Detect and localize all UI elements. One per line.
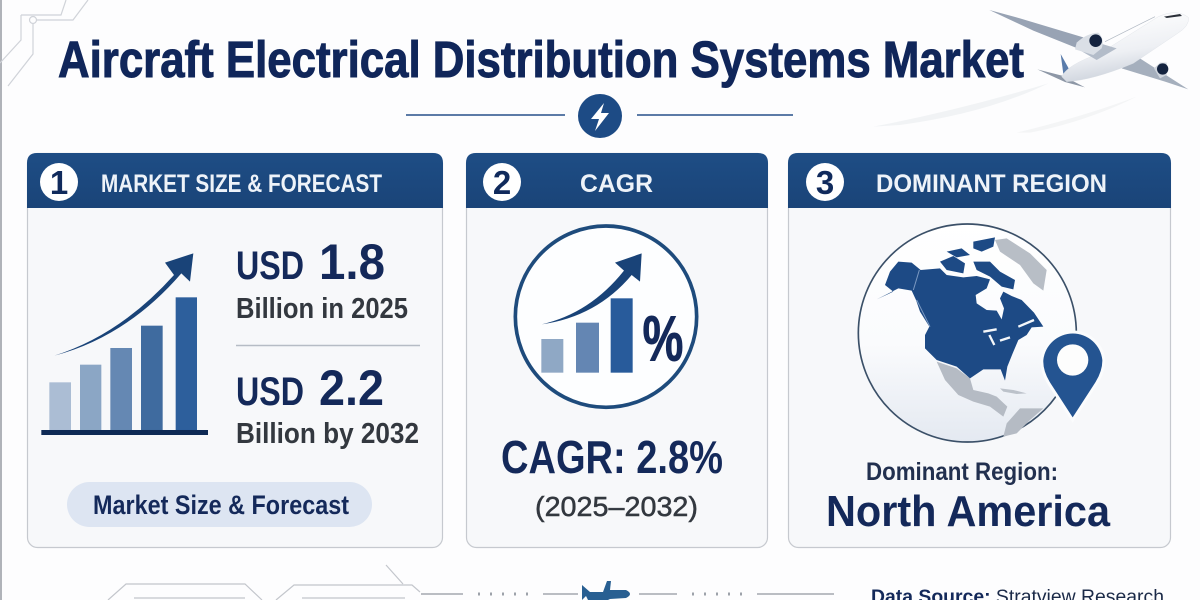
panel: dominant region bbox=[788, 153, 1171, 548]
stat: 2032 market size: Billion by 2032 bbox=[236, 418, 419, 450]
number badge 1 bbox=[40, 163, 78, 201]
stat: 2025 market size: Billion in 2025 bbox=[236, 293, 408, 325]
number badge 3 bbox=[806, 163, 844, 201]
panel 2 heading: CAGR bbox=[580, 170, 653, 198]
panel 3 header bar bbox=[788, 153, 1171, 208]
stat: 2025 market size bbox=[236, 234, 408, 325]
stat: 2032 market size: 2.2 bbox=[319, 360, 384, 416]
number badge 1: 1 bbox=[50, 164, 68, 201]
panel 2 header bar bbox=[466, 153, 768, 208]
dotted flight path with airplane icon bbox=[421, 581, 834, 600]
panel 1 heading: MARKET SIZE & FORECAST bbox=[101, 170, 382, 198]
stat: 2025 market size: 1.8 bbox=[319, 234, 385, 290]
panel: CAGR bbox=[466, 153, 768, 548]
globe map of North America with location pin bbox=[858, 224, 1102, 442]
icon: airplane with contrails bbox=[873, 10, 1189, 133]
stat: 2032 market size bbox=[236, 360, 419, 450]
panel 3 heading: DOMINANT REGION bbox=[876, 170, 1107, 198]
stat: 2025 market size: USD bbox=[236, 244, 304, 288]
title divider with lightning icon bbox=[406, 94, 793, 138]
region label: Dominant Region: bbox=[866, 458, 1058, 486]
icon: circular growth chart with percent: % bbox=[643, 302, 683, 374]
number badge 2: 2 bbox=[493, 164, 511, 201]
CAGR value: CAGR: 2.8% bbox=[501, 431, 723, 483]
pill label bbox=[67, 482, 372, 527]
region name: North America bbox=[826, 487, 1110, 536]
CAGR period: (2025–2032) bbox=[535, 491, 698, 522]
number badge 2 bbox=[483, 163, 521, 201]
panel 1 header bar bbox=[27, 153, 443, 208]
panel: market size and forecast bbox=[27, 153, 443, 548]
number badge 3: 3 bbox=[816, 164, 834, 201]
title: Aircraft Electrical Distribution Systems Market bbox=[58, 31, 1024, 88]
bar chart with growth arrow bbox=[41, 253, 208, 435]
icon: circular growth chart with percent bbox=[515, 226, 697, 407]
stat: 2032 market size: USD bbox=[236, 370, 304, 414]
pill label: Market Size & Forecast bbox=[93, 490, 349, 520]
